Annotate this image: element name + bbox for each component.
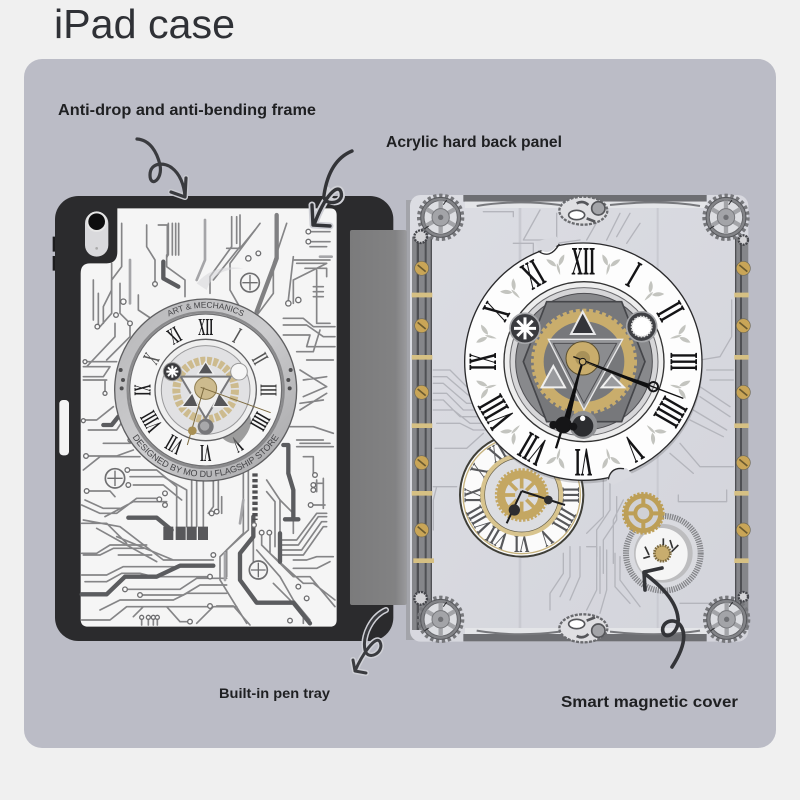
big clock [460, 237, 706, 485]
faded circuit pattern [433, 210, 733, 613]
center mechanism [504, 282, 664, 442]
ring text: DESIGNED BY MO DU FLAGSHIP STORE [132, 434, 279, 478]
cover shadow [406, 200, 416, 640]
roman numerals: IIII [645, 390, 696, 434]
roman numerals: X [474, 295, 519, 328]
small clock: V [534, 522, 557, 551]
roman numerals [460, 239, 706, 485]
roman numerals: VI [575, 440, 592, 485]
mechanism [219, 413, 251, 444]
roman numerals: I [620, 254, 647, 296]
roman numerals: XII [571, 239, 595, 284]
clock hands [187, 387, 271, 445]
circuit pattern [81, 215, 335, 625]
roman numerals: VIII [469, 388, 523, 436]
roman numerals: III [661, 352, 706, 371]
rim notches [535, 237, 559, 252]
roman numerals [130, 314, 282, 466]
label: magnetic cover: Smart magnetic cover [561, 694, 738, 711]
roman numerals: XI [514, 251, 552, 298]
arrow: to frame [137, 139, 186, 197]
arrow: to pen tray [353, 610, 386, 673]
fleur ornaments [476, 255, 690, 469]
small clock: VI [514, 529, 529, 557]
small clock: IIII [546, 503, 581, 535]
ring text: ART & MECHANICS [168, 302, 244, 316]
side rails and frame [412, 195, 748, 641]
product: case back view [52, 196, 406, 641]
roman numerals: VII [512, 423, 555, 474]
roman numerals: V [227, 431, 247, 458]
small clock [460, 433, 583, 557]
fold lines [519, 200, 659, 637]
dashed ladder trace [247, 473, 263, 520]
small clock: IX [460, 487, 487, 503]
small clock: II [549, 459, 578, 482]
small clock: XII [511, 433, 532, 461]
roman numerals: VIII [135, 407, 167, 436]
product: smart cover front view [406, 195, 750, 642]
roman numerals: III [255, 384, 282, 396]
small clock: X [466, 460, 494, 482]
roman numerals: V [617, 426, 650, 471]
arrow: to magnetic cover [644, 568, 684, 667]
side buttons [53, 237, 55, 271]
corner gears [414, 195, 749, 641]
cover base [410, 195, 748, 642]
roman numerals: X [138, 349, 165, 368]
built-in pen tray [59, 400, 69, 455]
title: iPad case [54, 1, 235, 47]
roman numerals: I [229, 323, 245, 348]
small gears [623, 493, 701, 591]
black protective frame [55, 196, 393, 641]
label: pen tray: Built-in pen tray [219, 685, 330, 701]
label: back panel: Acrylic hard back panel [386, 134, 562, 151]
ring text [132, 302, 279, 478]
acrylic back panel [81, 208, 337, 627]
roman numerals: II [648, 295, 693, 328]
back clock medallion [114, 298, 298, 482]
gray fold flap [350, 230, 407, 605]
arrow: to back panel [312, 151, 352, 226]
roman numerals: IX [460, 353, 505, 370]
top and bottom ornaments [559, 197, 607, 642]
gold screws and clamps [412, 261, 750, 563]
roman numerals: IIII [245, 408, 275, 435]
small clock: VII [482, 520, 513, 554]
big clock hands [549, 357, 683, 448]
roman numerals: II [247, 349, 273, 369]
roman numerals: XI [163, 321, 186, 350]
camera cutout [85, 211, 108, 257]
small clock: VIII [462, 501, 498, 537]
small clock: XI [484, 438, 511, 469]
roman numerals: VII [161, 429, 187, 459]
roman numerals: IX [130, 384, 156, 396]
roman numerals: VI [200, 440, 211, 466]
pads [163, 527, 208, 540]
roman numerals: XII [198, 314, 213, 340]
small clock: I [537, 440, 555, 467]
label: frame: Anti-drop and anti-bending frame [58, 102, 316, 119]
small clock: III [556, 487, 583, 503]
